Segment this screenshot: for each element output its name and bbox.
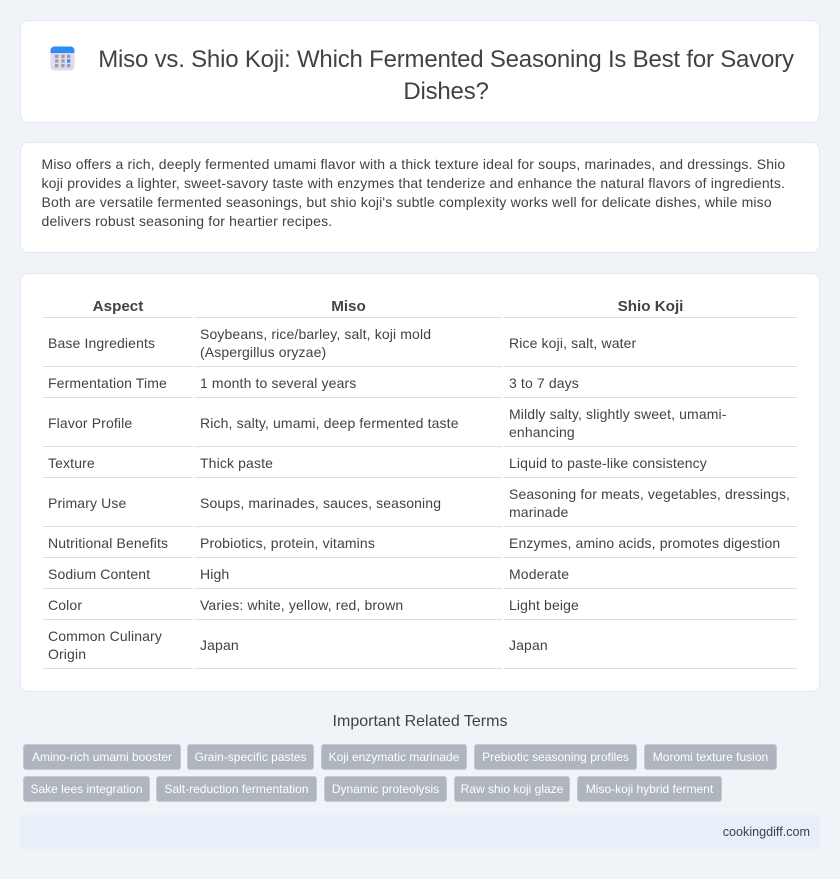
comparison table card — [20, 273, 820, 692]
row: common culinary origin: Japan — [200, 637, 239, 653]
intro card — [20, 142, 820, 253]
row: flavor profile: Rich, salty, umami, deep fermented taste — [200, 415, 459, 431]
tag — [23, 744, 181, 770]
row: common culinary origin: Common Culinary — [48, 628, 162, 644]
tag: Amino-rich umami booster — [32, 750, 172, 764]
tag — [644, 744, 777, 770]
row: color: Color — [48, 597, 82, 613]
row: primary use: Soups, marinades, sauces, seasoning — [200, 495, 441, 511]
footer source: cookingdiff.com — [723, 825, 810, 839]
tag: Dynamic proteolysis — [332, 782, 439, 796]
row: base ingredients: Base Ingredients — [48, 335, 155, 351]
tag: Miso-koji hybrid ferment — [586, 782, 713, 796]
row: flavor profile: Mildly salty, slightly sweet, umami- — [509, 406, 727, 422]
row: primary use: Primary Use — [48, 495, 126, 511]
comparison table — [43, 298, 797, 669]
row: sodium content — [48, 566, 569, 582]
row: flavor profile: Flavor Profile — [48, 415, 132, 431]
table header: Miso — [331, 298, 366, 315]
row: base ingredients: (Aspergillus oryzae) — [200, 344, 326, 360]
intro text: Both are versatile fermented seasonings, but shio koji's subtle complexity works well for delicate dishes, while miso — [42, 194, 772, 210]
row: flavor profile — [48, 406, 727, 440]
tag: Prebiotic seasoning profiles — [482, 750, 629, 764]
footer bar — [20, 815, 820, 849]
row: nutritional benefits: Probiotics, protein, vitamins — [200, 535, 375, 551]
table header — [93, 298, 683, 315]
row: fermentation time — [48, 375, 579, 391]
row: nutritional benefits: Enzymes, amino acids, promotes digestion — [509, 535, 780, 551]
row: sodium content: High — [200, 566, 229, 582]
tag — [577, 776, 722, 802]
row: nutritional benefits — [48, 535, 780, 551]
tag — [474, 744, 637, 770]
row: color: Light beige — [509, 597, 579, 613]
row: color: Varies: white, yellow, red, brown — [200, 597, 403, 613]
row: primary use: Seasoning for meats, vegetables, dressings, — [509, 486, 790, 502]
tag: Sake lees integration — [30, 782, 143, 796]
row: texture — [48, 455, 707, 471]
row: texture: Texture — [48, 455, 95, 471]
row: texture: Thick paste — [200, 455, 273, 471]
row: texture: Liquid to paste-like consistency — [509, 455, 707, 471]
row: common culinary origin — [48, 628, 548, 662]
row: nutritional benefits: Nutritional Benefits — [48, 535, 168, 551]
row: sodium content: Sodium Content — [48, 566, 150, 582]
row: common culinary origin: Origin — [48, 646, 86, 662]
tag — [454, 776, 570, 802]
tag: Koji enzymatic marinade — [329, 750, 459, 764]
icon: calendar — [50, 46, 74, 70]
row: primary use: marinade — [509, 504, 568, 520]
row: fermentation time: 1 month to several years — [200, 375, 356, 391]
related terms heading: Important Related Terms — [333, 713, 507, 730]
intro text: Miso offers a rich, deeply fermented umami flavor with a thick texture ideal for soups, marinades, and dressings. Shio — [42, 156, 785, 172]
row: color — [48, 597, 579, 613]
tag — [321, 744, 467, 770]
heading: Miso vs. Shio Koji: Which Fermented Seasoning Is Best for Savory Dishes? — [98, 46, 794, 105]
tag — [187, 744, 314, 770]
tag — [324, 776, 447, 802]
title card — [20, 20, 820, 123]
intro text: delivers robust seasoning for heartier recipes. — [42, 212, 332, 228]
row: base ingredients: Soybeans, rice/barley, salt, koji mold — [200, 326, 431, 342]
tag — [156, 776, 317, 802]
table header: Shio Koji — [618, 298, 683, 315]
table header: Aspect — [93, 298, 143, 315]
row: fermentation time: Fermentation Time — [48, 375, 167, 391]
tag: Salt-reduction fermentation — [164, 782, 309, 796]
intro text — [42, 156, 785, 229]
related terms tags — [23, 744, 777, 802]
row: fermentation time: 3 to 7 days — [509, 375, 579, 391]
tag: Grain-specific pastes — [194, 750, 307, 764]
row: base ingredients — [48, 326, 636, 360]
tag: Moromi texture fusion — [653, 750, 768, 764]
intro text: koji provides a lighter, sweet-savory taste with enzymes that tenderize and enhance the natural flavors of ingredients. — [42, 174, 785, 190]
row: sodium content: Moderate — [509, 566, 569, 582]
tag — [23, 776, 150, 802]
row: flavor profile: enhancing — [509, 424, 575, 440]
row: base ingredients: Rice koji, salt, water — [509, 335, 636, 351]
tag: Raw shio koji glaze — [461, 782, 563, 796]
row: primary use — [48, 486, 790, 520]
row: common culinary origin: Japan — [509, 637, 548, 653]
